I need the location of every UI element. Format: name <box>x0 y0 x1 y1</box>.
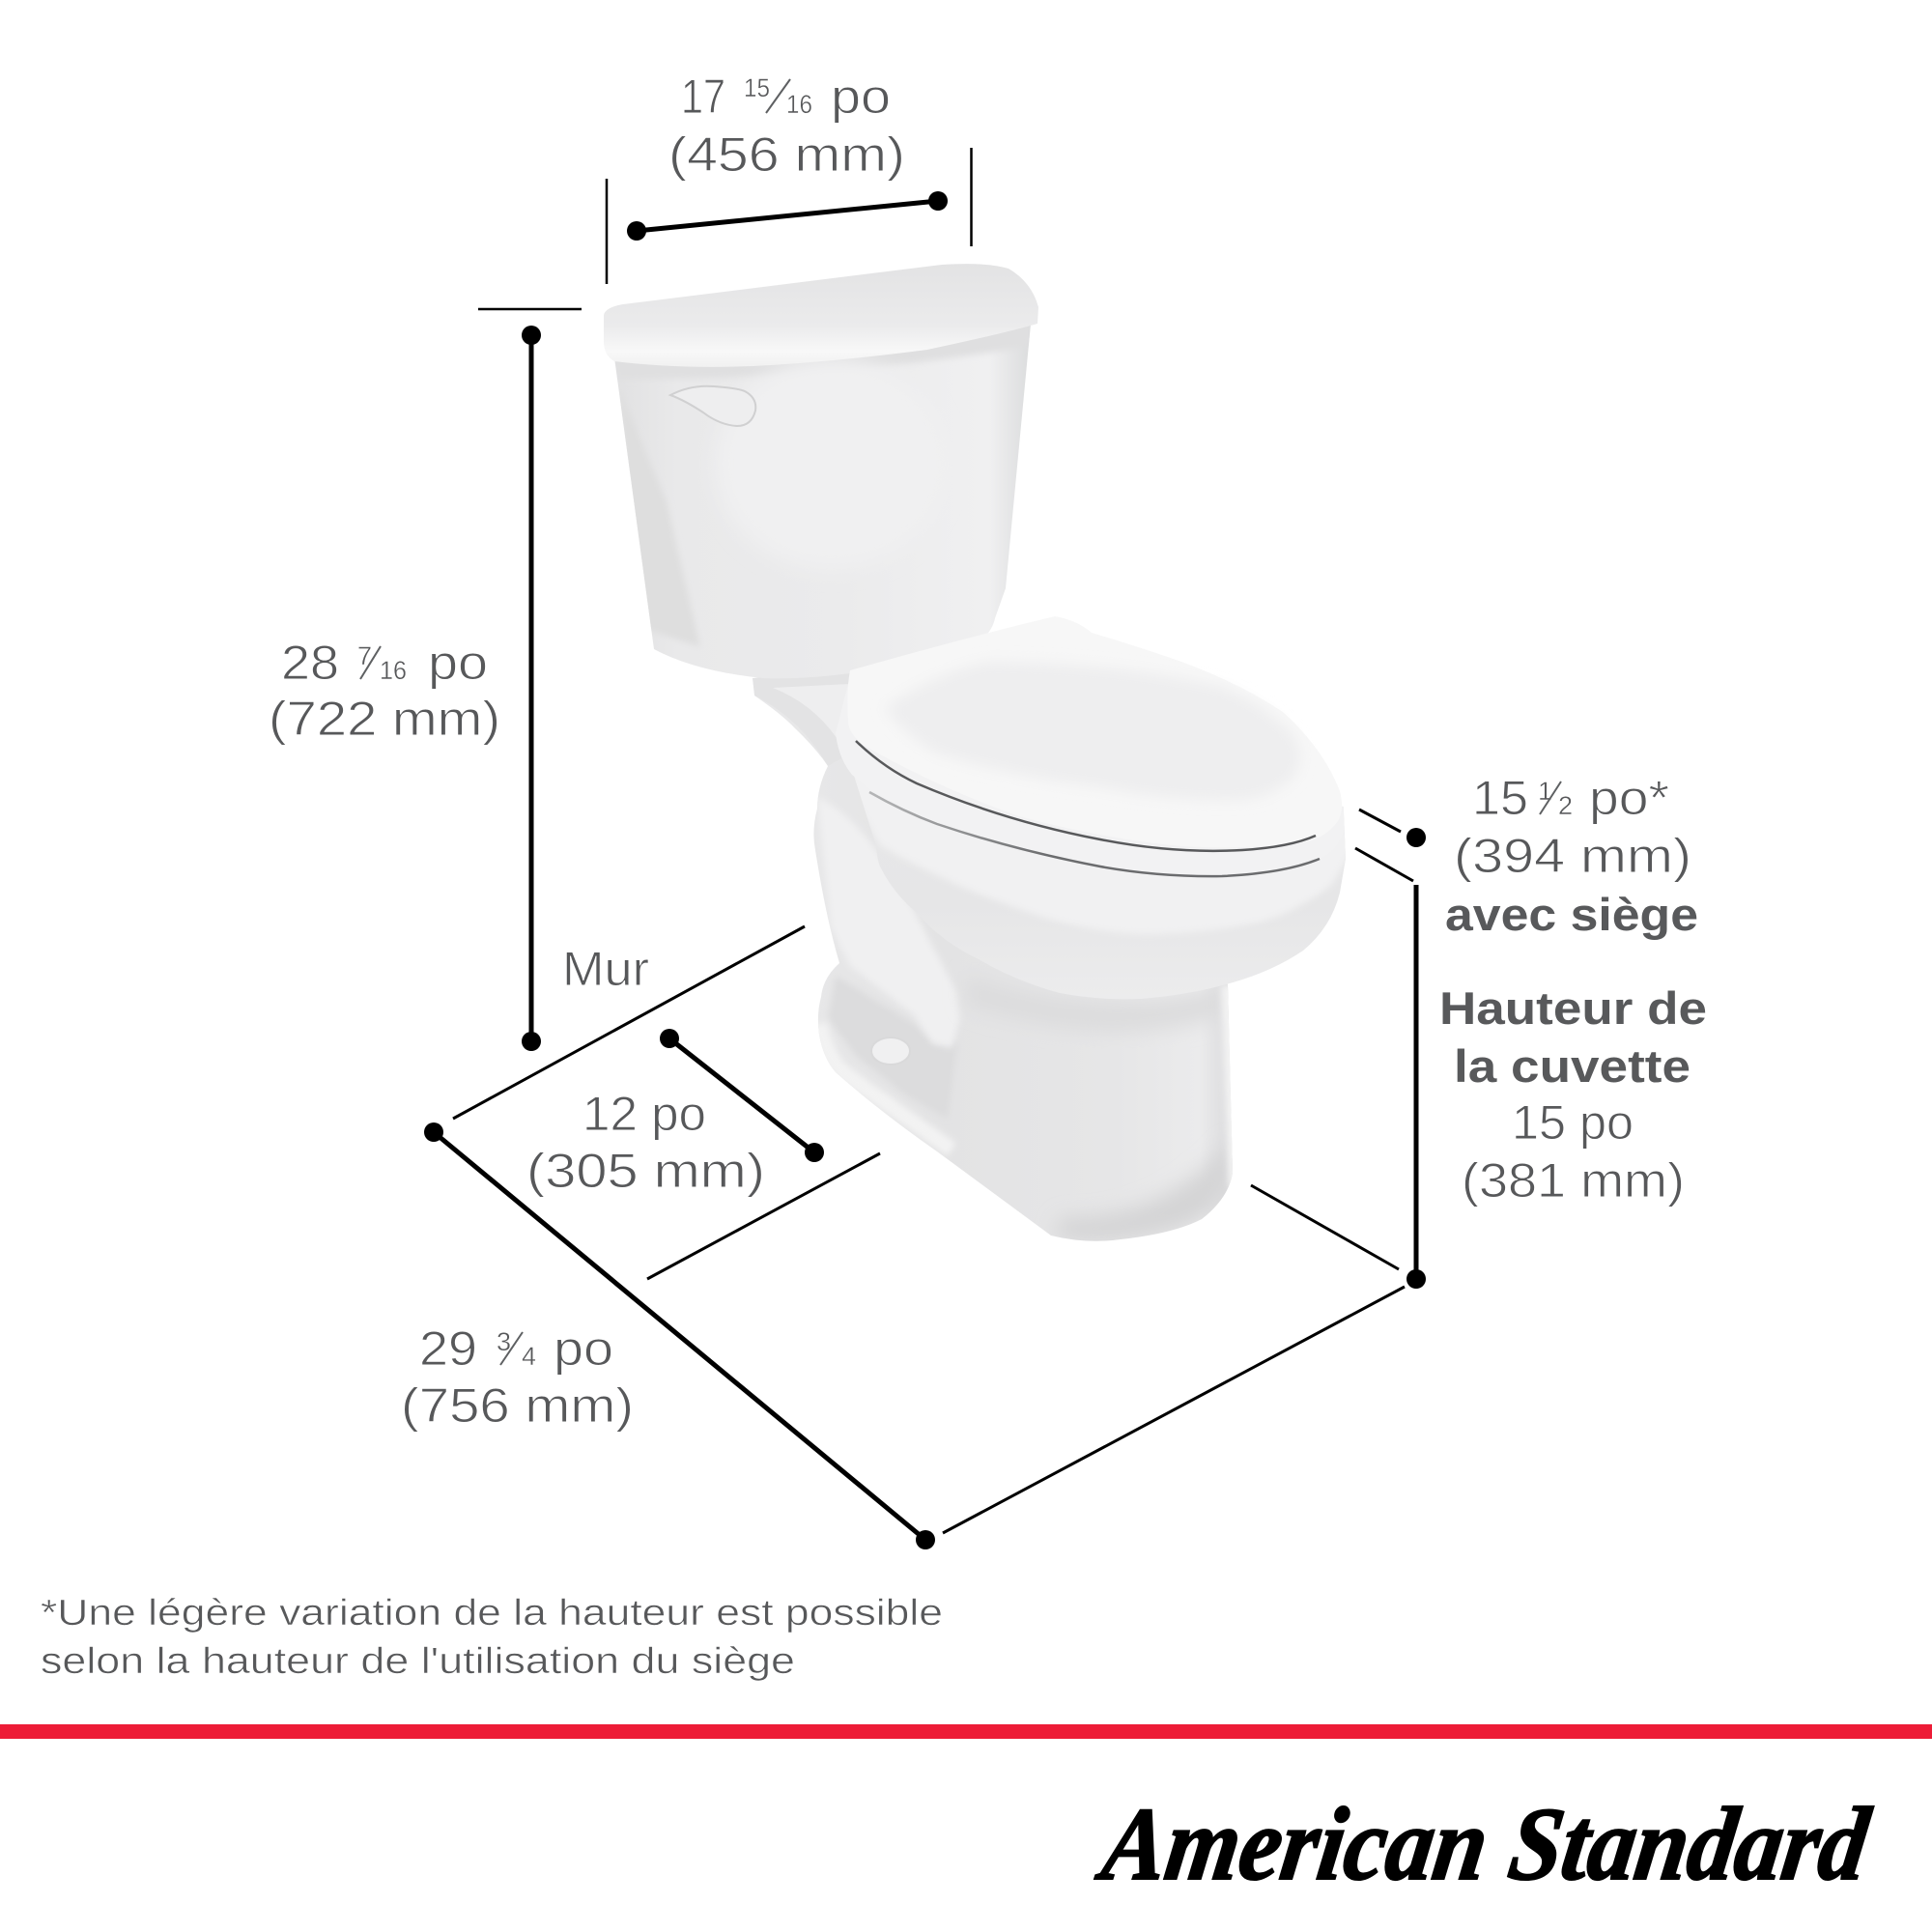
width label: po <box>831 70 891 124</box>
seat height label: 2 <box>1558 791 1573 820</box>
dimension: bowl and seat height <box>1406 771 1707 1289</box>
seat height label: 1 <box>1538 777 1552 806</box>
depth label <box>401 1321 634 1433</box>
bowl height label: Hauteur de <box>1439 982 1707 1034</box>
toilet seat <box>836 676 1344 877</box>
seat height label <box>1445 771 1698 940</box>
seat lid <box>847 616 1342 851</box>
depth arrow <box>424 1122 935 1549</box>
depth label: 29 <box>419 1321 477 1376</box>
wall and floor reference lines <box>453 810 1413 1533</box>
rough-in label: (305 mm) <box>526 1144 765 1198</box>
footnote: selon la hauteur de l'utilisation du siège <box>41 1641 795 1682</box>
American Standard logo: American Standard <box>1091 1786 1877 1902</box>
height label: 16 <box>380 656 407 685</box>
width label <box>668 70 905 182</box>
width label: 16 <box>786 90 812 119</box>
width label: 15 <box>744 73 770 102</box>
depth label: po <box>554 1321 613 1376</box>
bowl height label: la cuvette <box>1454 1040 1690 1092</box>
toilet tank <box>614 319 1031 678</box>
bowl height arrow <box>1406 828 1426 1289</box>
footnote <box>41 1593 943 1682</box>
dimension: depth <box>401 1122 935 1549</box>
height label: 7 <box>357 641 372 670</box>
depth label: 3 <box>497 1327 511 1356</box>
depth label: (756 mm) <box>401 1378 634 1433</box>
toilet base, neck and trapway <box>753 667 1246 1241</box>
width arrow <box>607 148 972 284</box>
bowl height label: (381 mm) <box>1462 1153 1685 1208</box>
seat height label: po* <box>1589 771 1669 825</box>
height label: (722 mm) <box>269 692 500 746</box>
dimension: rough-in <box>526 1029 824 1198</box>
rough-in label <box>526 1087 765 1198</box>
height label: po <box>428 636 488 690</box>
depth label: 4 <box>522 1342 536 1371</box>
height label <box>269 636 500 746</box>
rough-in arrow <box>660 1029 824 1162</box>
height label: 28 <box>281 636 339 690</box>
seat height label: 15 <box>1472 771 1528 825</box>
bowl <box>855 778 1346 999</box>
red divider bar <box>0 1724 1932 1739</box>
seat height label: (394 mm) <box>1454 829 1691 883</box>
seat height label: avec siège <box>1445 889 1698 940</box>
height arrow <box>478 309 582 1051</box>
toilet photo illustration <box>604 264 1352 1241</box>
tank flush lever <box>670 386 755 426</box>
seat lid inner panel <box>885 662 1300 800</box>
tank lid <box>604 264 1038 367</box>
seat lid edge line <box>856 741 1316 851</box>
wall label: Mur <box>562 942 649 996</box>
width label: 17 <box>681 70 725 124</box>
rough-in label: 12 po <box>582 1087 706 1141</box>
bowl height label <box>1439 982 1707 1208</box>
footnote: *Une légère variation de la hauteur est possible <box>41 1593 943 1634</box>
dimension: total height <box>269 309 582 1051</box>
dimension: tank width <box>607 70 972 284</box>
width label: (456 mm) <box>668 128 905 182</box>
bowl height label: 15 po <box>1512 1095 1634 1150</box>
